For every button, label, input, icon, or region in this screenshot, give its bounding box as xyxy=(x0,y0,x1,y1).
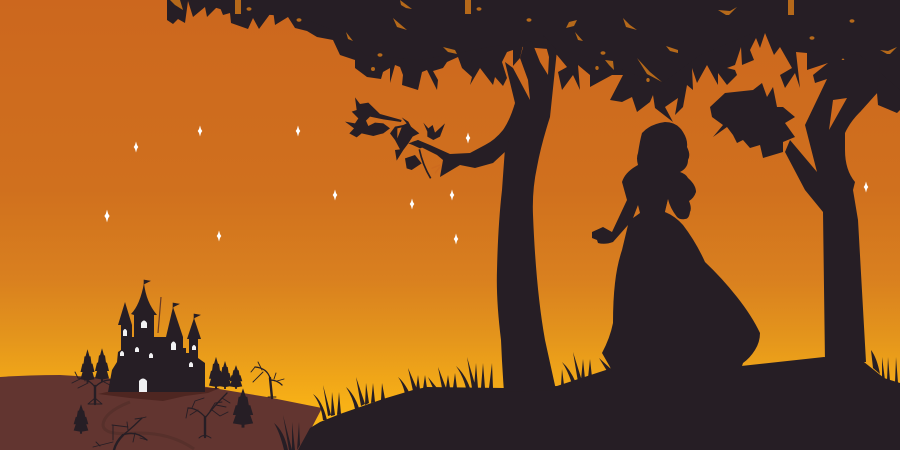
hill xyxy=(0,375,322,450)
canopy gaps xyxy=(170,0,897,88)
left tree trunk xyxy=(497,35,557,392)
canopy xyxy=(167,0,900,122)
trunk gap xyxy=(829,98,847,130)
canopy solid backing xyxy=(190,0,900,90)
grass tufts xyxy=(274,350,898,450)
castle shadow xyxy=(98,388,220,401)
castle xyxy=(108,280,205,392)
stars xyxy=(104,126,868,244)
bare trees xyxy=(72,362,284,450)
pines xyxy=(74,348,253,434)
low branch with leaves xyxy=(345,97,515,178)
leafy branch clump xyxy=(710,83,795,158)
winding path xyxy=(103,402,194,449)
right tree trunk xyxy=(785,60,880,362)
foreground hill xyxy=(298,357,900,450)
princess xyxy=(592,122,760,372)
